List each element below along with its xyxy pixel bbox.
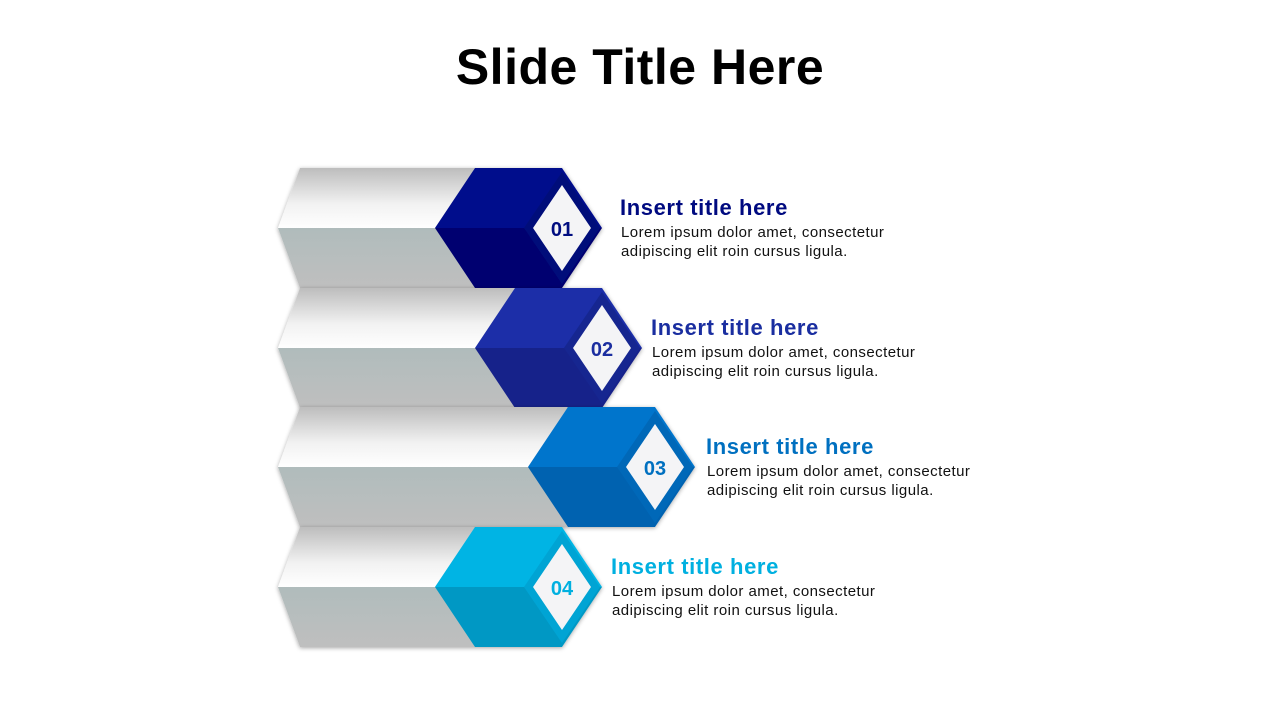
text: Insert title here: [651, 315, 819, 340]
bar 2: [278, 288, 642, 408]
text: Insert title here: [706, 434, 874, 459]
text: adipiscing elit roin cursus ligula.: [612, 602, 839, 619]
text: adipiscing elit roin cursus ligula.: [707, 482, 934, 499]
bar 3: [278, 407, 695, 527]
text: Insert title here: [620, 195, 788, 220]
bar 1: 01: [551, 219, 573, 241]
text: Lorem ipsum dolor amet, consectetur: [652, 344, 915, 361]
text block 3: [706, 434, 970, 499]
bar 2: 02: [591, 339, 613, 361]
text: Insert title here: [611, 554, 779, 579]
text: Lorem ipsum dolor amet, consectetur: [707, 463, 970, 480]
text block 1: [620, 195, 884, 260]
bar 4: 04: [551, 578, 574, 600]
text: adipiscing elit roin cursus ligula.: [621, 243, 848, 260]
text: adipiscing elit roin cursus ligula.: [652, 363, 879, 380]
title: Slide Title Here: [456, 39, 824, 95]
bar 4: [278, 527, 602, 647]
text block 2: [651, 315, 915, 380]
bar 3: 03: [644, 458, 666, 480]
text: Lorem ipsum dolor amet, consectetur: [612, 583, 875, 600]
text: Lorem ipsum dolor amet, consectetur: [621, 224, 884, 241]
text block 4: [611, 554, 875, 619]
bar 1: [278, 168, 602, 288]
